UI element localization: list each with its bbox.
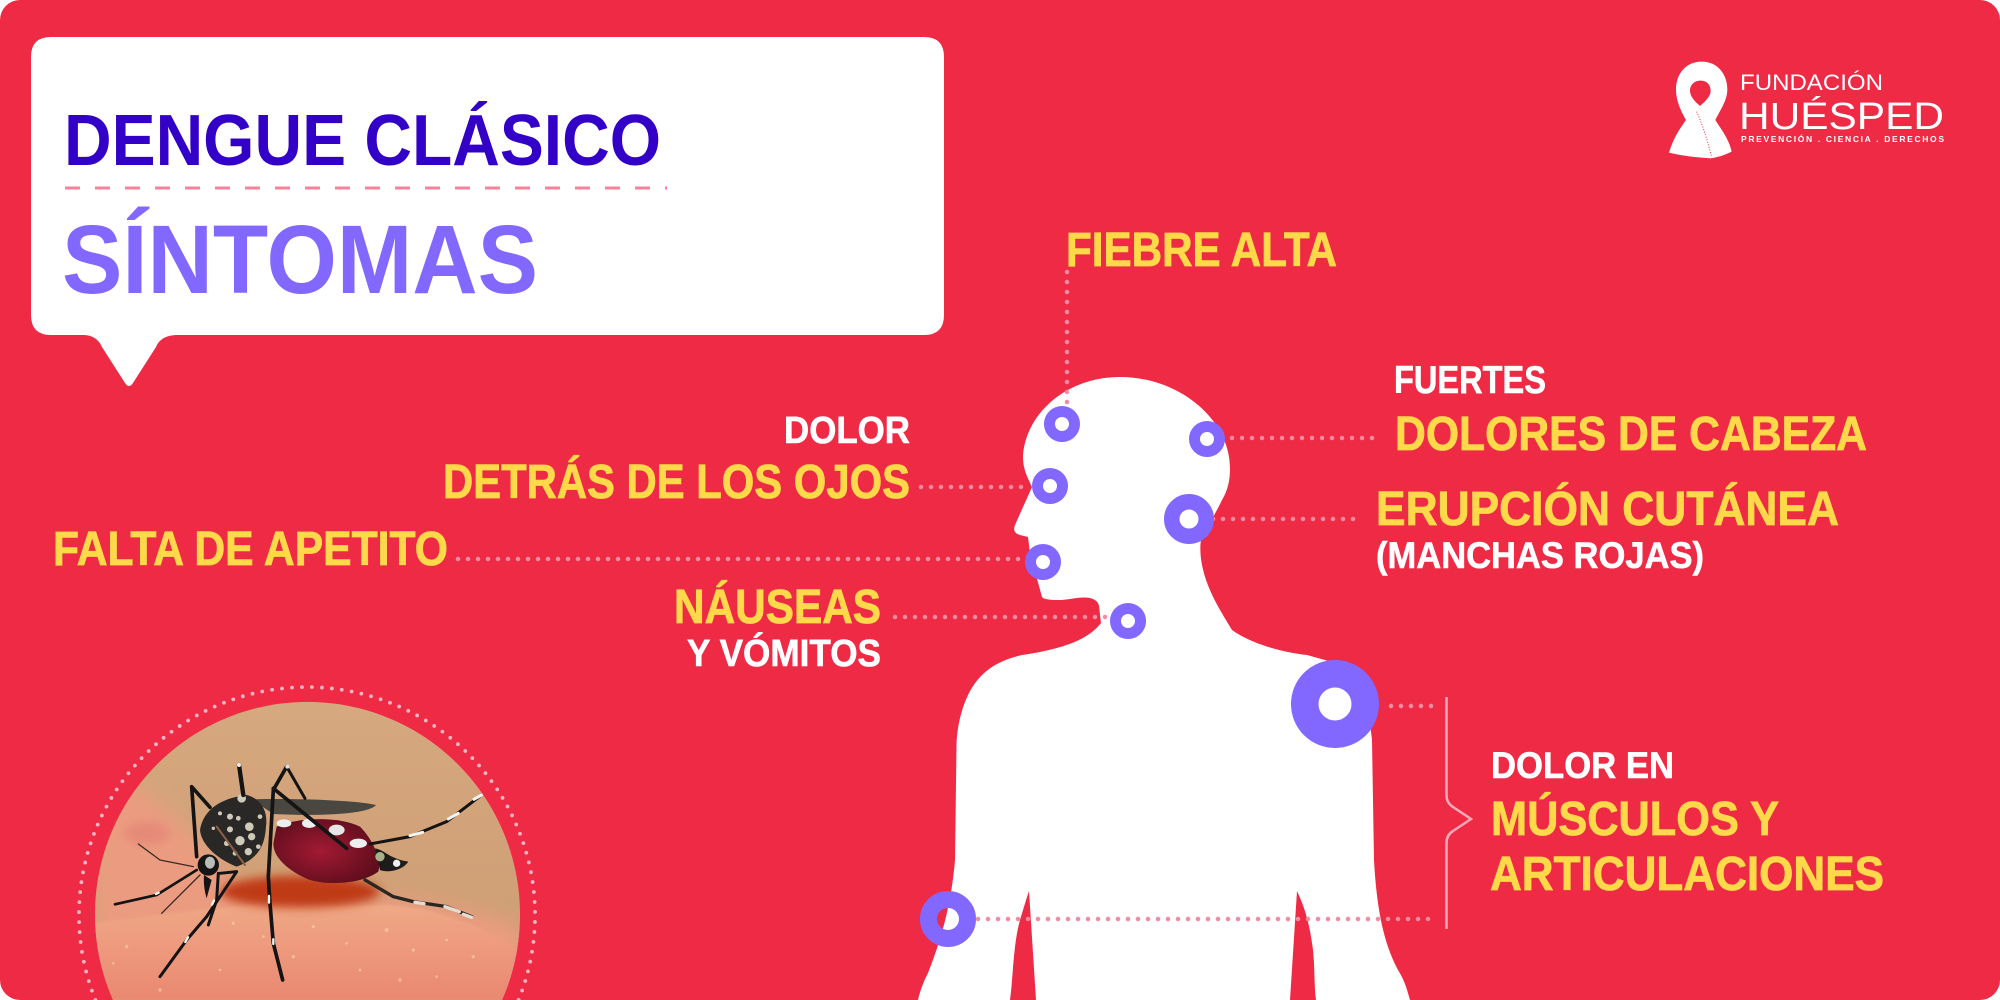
label: manchas rojas: (MANCHAS ROJAS) [1376,535,1704,576]
label: músculos y: MÚSCULOS Y [1491,791,1779,846]
label: dolor: DOLOR [784,410,910,452]
symptom: dolor detrás de los ojos [443,410,1062,509]
marker: throat [1116,608,1140,634]
label: dolores de cabeza: DOLORES DE CABEZA [1395,408,1867,461]
human silhouette [918,377,1410,1000]
label: articulaciones: ARTICULACIONES [1490,848,1884,901]
mosquito legs and antennae [115,765,482,980]
marker: elbow [928,900,968,938]
symptom: fiebre alta [1050,224,1337,436]
dotted ring around photo [79,687,535,1000]
label: falta de apetito: FALTA DE APETITO [53,523,448,576]
symptom: dolor en músculos y articulaciones [928,674,1884,938]
label: dolor en: DOLOR EN [1491,745,1674,786]
symptom: falta de apetito [53,523,1056,576]
symptom: erupción cutánea [1172,481,1839,576]
title: dengue clásico: DENGUE CLÁSICO [64,101,661,181]
logo text: huésped: HUÉSPED [1739,95,1944,138]
marker: shoulder [1305,674,1365,734]
label: náuseas: NÁUSEAS [674,580,881,634]
bubble shape [31,37,944,386]
marker: mouth [1030,550,1056,574]
mosquito tail [375,848,408,871]
mosquito abdomen [273,819,379,883]
marker: eye [1038,474,1062,498]
symptom: fuertes dolores de cabeza [1194,359,1867,461]
mosquito thorax [200,795,266,867]
label: y vómitos: Y VÓMITOS [687,631,881,675]
panel: title speech bubble [31,37,944,386]
label: fiebre alta: FIEBRE ALTA [1066,224,1337,277]
marker: forehead [1050,412,1074,436]
marker: neck skin [1172,502,1206,536]
logo: Fundación Huésped [1669,62,1944,158]
subtitle: síntomas: SÍNTOMAS [62,205,538,314]
mosquito wing [252,799,376,815]
label: detrás de los ojos: DETRÁS DE LOS OJOS [443,455,910,509]
label: fuertes: FUERTES [1394,359,1546,402]
icon: ribbon [1669,62,1732,158]
logo text: fundación: FUNDACIÓN [1740,70,1883,95]
photo: mosquito on skin [79,687,535,1000]
symptom: náuseas y vómitos [674,580,1140,675]
bracket [1446,697,1471,929]
leg bands [156,763,482,944]
logo text: tagline: PREVENCIÓN . CIENCIA . DERECHOS [1741,133,1944,144]
mosquito head [198,854,219,876]
marker: temple [1194,426,1220,452]
label: erupción cutánea: ERUPCIÓN CUTÁNEA [1376,481,1839,536]
